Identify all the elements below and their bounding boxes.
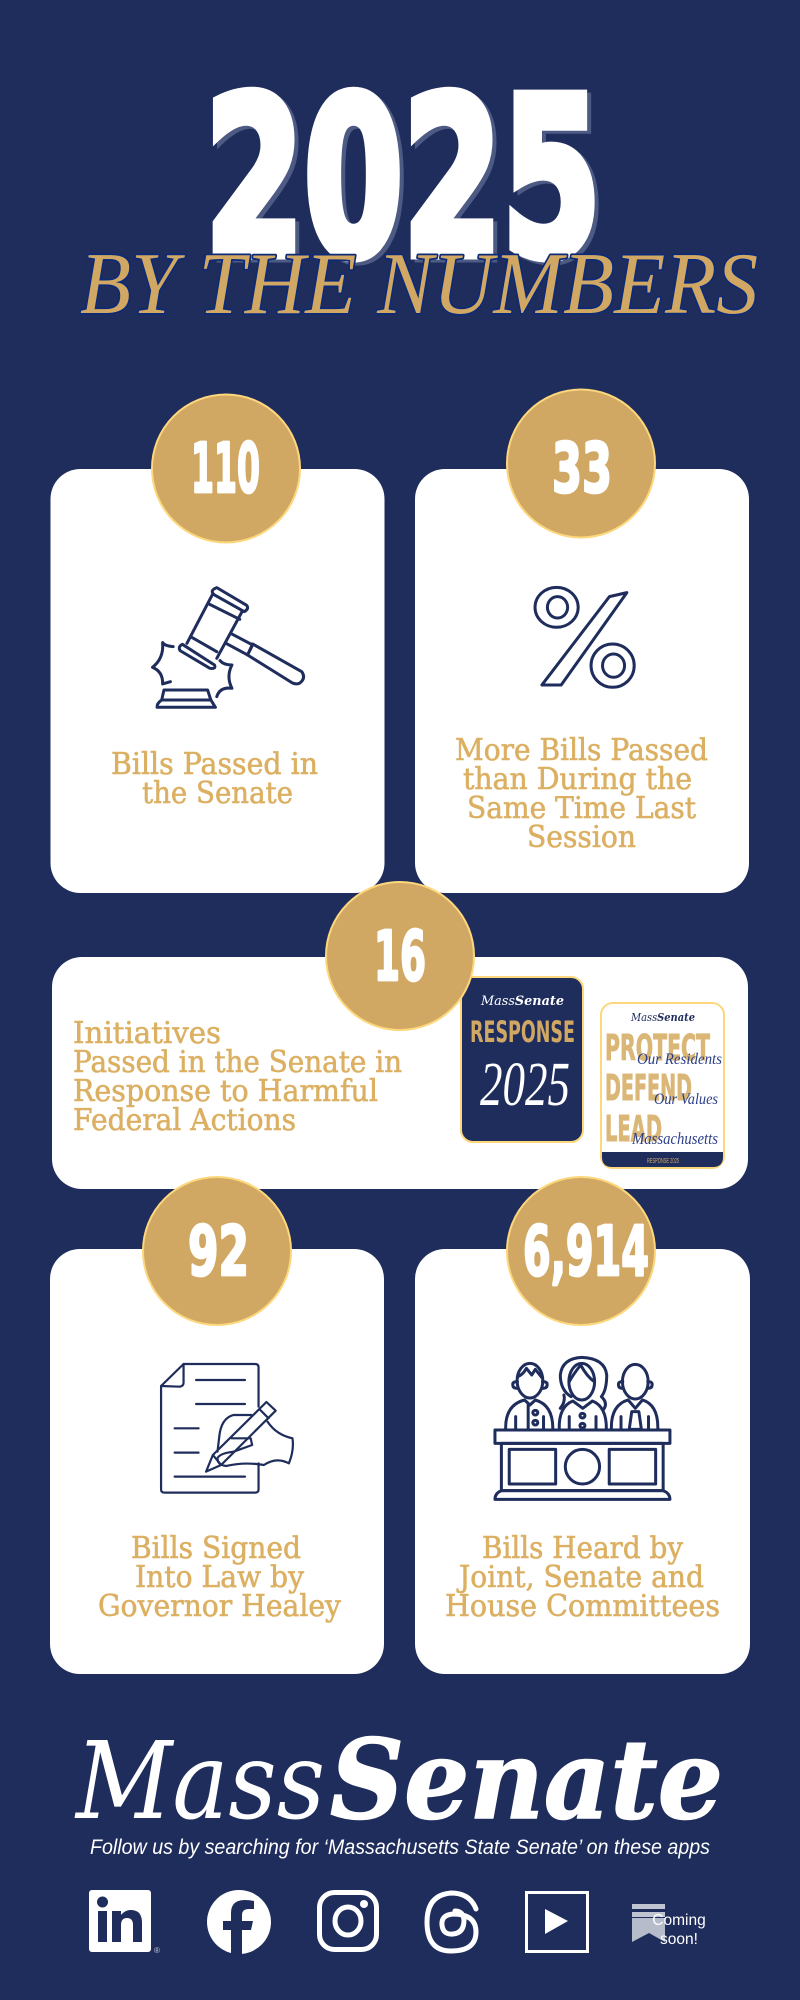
caption: initiatives: Federal Actions [73,1103,296,1138]
subtitle: by the numbers: BY THE NUMBERS [80,236,758,333]
panel: more bills passed [415,469,749,893]
poster: protect defend lead: Our Values [654,1091,718,1108]
caption: initiatives [73,1016,402,1138]
icon: coming soon app: Coming [652,1912,706,1929]
poster: response 2025 [461,977,583,1142]
icon: linkedin: ® [154,1946,160,1955]
caption: more bills passed: Session [527,820,636,855]
poster: protect defend lead: LEAD [605,1109,662,1150]
logo: masssenate: Mass [74,1720,325,1844]
badge: 92 [143,1177,291,1325]
caption: more bills passed: than During the [463,762,692,797]
panel: 16 initiatives [52,957,748,1189]
caption: initiatives: Response to Harmful [73,1074,378,1109]
badge: 33: 33 [552,429,612,509]
logo: masssenate [74,1715,723,1844]
poster: response 2025: RESPONSE [470,1015,575,1049]
poster: response 2025: MassSenate [480,994,564,1009]
title: 2025: 2025 [205,53,601,306]
panel: bills heard by committees [415,1249,750,1674]
icon: committee at desk [495,1357,670,1499]
caption: more bills passed: More Bills Passed [455,733,708,768]
caption: bills passed in the senate: the Senate [142,776,293,811]
badge: 16: 16 [374,917,426,997]
badge: 16 [326,882,474,1030]
caption: bills heard: Joint, Senate and [456,1560,704,1595]
title: 2025 [205,53,605,309]
caption: bills signed: Into Law by [135,1560,304,1595]
icon: coming soon app: soon! [660,1931,698,1948]
poster: protect defend lead: DEFEND [605,1068,692,1109]
icon: facebook [207,1890,271,1954]
caption: bills signed [98,1531,341,1624]
icon: hand signing document [161,1364,293,1493]
caption: bills signed: Governor Healey [98,1589,341,1624]
badge: 6,914 [507,1177,655,1325]
poster: protect defend lead [601,1003,724,1168]
caption: initiatives: Passed in the Senate in [73,1045,402,1080]
caption: bills heard: Bills Heard by [482,1531,683,1566]
panel: bills passed in the senate [50,469,384,893]
title: 2025: 2025 [209,56,605,309]
caption: bills heard [445,1531,720,1624]
badge: 110: 110 [191,429,260,509]
caption: bills heard: House Committees [445,1589,720,1624]
icon: video play [526,1892,588,1952]
icon: threads [427,1893,476,1951]
caption: bills passed in the senate [111,747,318,811]
icon: linkedin [89,1890,160,1955]
caption: initiatives: Initiatives [73,1016,221,1051]
poster: protect defend lead: Our Residents [637,1051,722,1068]
icon: coming soon app [632,1904,706,1948]
badge: 6,914: 6,914 [523,1212,649,1292]
caption: bills signed: Bills Signed [131,1531,301,1566]
icon: gavel [153,588,304,707]
caption: more bills passed [455,733,708,855]
badge: 92: 92 [188,1212,249,1292]
text: follow us: Follow us by searching for ‘Massachusetts State Senate’ on these apps [90,1836,710,1859]
caption: bills passed in the senate: Bills Passed in [111,747,318,782]
badge: 110 [152,394,300,542]
panel: bills signed into law [50,1249,384,1674]
poster: protect defend lead: Massachusetts [631,1129,718,1148]
poster: response 2025: 2025 [480,1051,570,1119]
poster: protect defend lead: MassSenate [630,1011,695,1024]
icon: instagram [320,1892,376,1950]
poster: protect defend lead: PROTECT [605,1028,710,1069]
caption: more bills passed: Same Time Last [467,791,696,826]
badge: 33 [507,390,655,538]
logo: masssenate: Senate [330,1715,723,1844]
poster: protect defend lead: RESPONSE 2025 [647,1158,679,1165]
icon: percent sign [535,587,634,687]
